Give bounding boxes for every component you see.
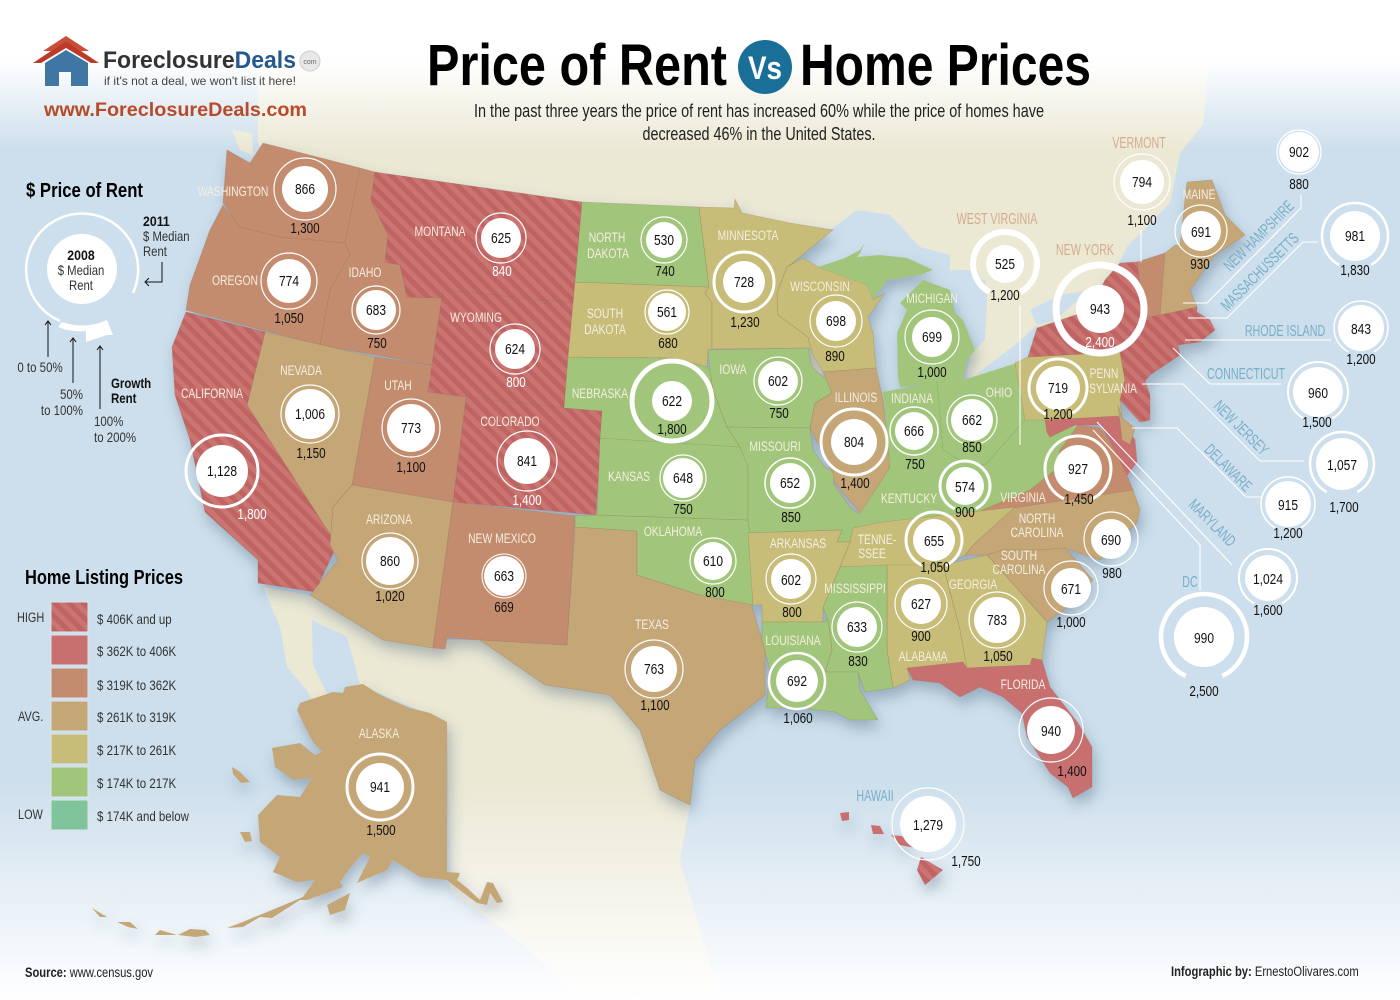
state names on map: IDAHO — [349, 264, 381, 280]
rent circle: California: 1,128 — [207, 463, 237, 479]
state names on map: ARIZONA — [366, 511, 413, 527]
rent circle: Arizona: 860 — [380, 553, 400, 569]
state names off map: VERMONT — [1112, 134, 1166, 152]
title: Price of Rent — [427, 33, 727, 98]
rent circle: New Jersey: 1,057 — [1327, 457, 1357, 473]
legend: $ 174K and below — [97, 808, 190, 824]
rent circle: Washington — [274, 158, 336, 236]
rent circle: New Mexico — [482, 554, 526, 615]
rent circle: Wisconsin: 890 — [825, 348, 845, 364]
rent circle: Indiana — [890, 407, 938, 472]
state names on map: KANSAS — [608, 468, 650, 484]
state names on map: CAROLINA — [993, 561, 1046, 577]
rent circle: Pennsylvania: 719 — [1048, 380, 1068, 396]
state names off map: CONNECTICUT — [1207, 365, 1285, 383]
rent circle: Arkansas — [766, 554, 816, 620]
rent circle: South Dakota: 680 — [658, 335, 678, 351]
state names on map: IOWA — [719, 361, 747, 377]
rent circle: Vermont: 794 — [1132, 174, 1152, 190]
logo: if it's not a deal, we won't list it here! — [104, 74, 296, 88]
rent circle: South Dakota: 561 — [657, 304, 677, 320]
rent circle: Tennessee: 1,050 — [920, 559, 950, 575]
rent circle: Rhode Island: 843 — [1351, 321, 1371, 337]
key: rent circle diagram: 100% — [94, 413, 123, 429]
rent circle: New Jersey — [1310, 432, 1374, 515]
rent circle: Louisiana — [769, 653, 825, 726]
rent circle: Maine: 930 — [1190, 256, 1210, 272]
state names on map: ILLINOIS — [835, 389, 877, 405]
rent circle: Maryland — [1239, 549, 1297, 618]
rent circle: Arizona: 1,020 — [375, 588, 405, 604]
rent circle: Arkansas: 602 — [781, 572, 801, 588]
key: rent circle diagram: $ Median — [58, 262, 104, 278]
state names on map — [181, 183, 1215, 741]
rent circle: Maryland: 1,024 — [1253, 571, 1283, 587]
rent circle: Kansas: 750 — [673, 501, 693, 517]
rent circle: Missouri: 850 — [781, 509, 801, 525]
rent circle: Alaska — [347, 754, 413, 838]
rent circle: Oklahoma: 610 — [703, 553, 723, 569]
rent circle: Nevada: 1,006 — [295, 406, 325, 422]
rent circle: Delaware: 1,200 — [1273, 525, 1303, 541]
key: rent circle diagram: Growth — [111, 375, 151, 391]
title — [427, 33, 1091, 98]
rent circle: Michigan: 1,000 — [917, 364, 947, 380]
legend: $ 362K to 406K — [97, 643, 177, 659]
rent circle: Wyoming: 800 — [506, 374, 526, 390]
Mexico landmass — [263, 587, 720, 1000]
rent circle: Alabama: 627 — [911, 596, 931, 612]
state names off map: MARYLAND — [1185, 496, 1240, 550]
state names on map: MISSISSIPPI — [824, 580, 886, 596]
title: Home Prices — [800, 33, 1091, 98]
subtitle: decreased 46% in the United States. — [642, 124, 876, 144]
rent circle: Maine: 691 — [1191, 224, 1211, 240]
state names on map: ALABAMA — [899, 648, 948, 664]
rent circle: Connecticut — [1288, 362, 1348, 430]
rent circle: Oklahoma: 800 — [705, 584, 725, 600]
key: rent circle diagram — [17, 213, 190, 445]
rent circle: Nebraska — [632, 361, 712, 441]
logo: com — [303, 59, 317, 66]
rent circle: Wisconsin: 698 — [826, 313, 846, 329]
legend: $ 174K to 217K — [97, 775, 177, 791]
rent circle: Wyoming — [490, 324, 540, 390]
state names on map: KENTUCKY — [881, 490, 937, 506]
state names on map: DAKOTA — [584, 321, 627, 337]
rent circle: Connecticut: 960 — [1308, 385, 1328, 401]
state names on map: SOUTH — [587, 305, 623, 321]
state names on map: COLORADO — [480, 413, 540, 429]
state names on map: MONTANA — [415, 223, 466, 239]
rent circle: Florida — [1019, 698, 1087, 779]
state names on map: NEVADA — [280, 362, 323, 378]
rent circle: Hawaii: 1,750 — [951, 853, 981, 869]
heading: home listing prices: Home Listing Prices — [25, 567, 183, 589]
rent circle: New York — [1056, 265, 1144, 353]
state names on map: NEW MEXICO — [468, 530, 536, 546]
state names on map: FLORIDA — [1001, 676, 1046, 692]
lower 48 states map — [172, 143, 1245, 805]
key: rent circle diagram: Rent — [143, 243, 167, 259]
state names on map: SOUTH — [1001, 547, 1037, 563]
legend: $ 319K to 362K — [97, 677, 177, 693]
rent circle: Iowa: 602 — [768, 373, 788, 389]
source: Source: www.census.gov — [25, 965, 154, 980]
rent circle: Minnesota: 1,230 — [730, 314, 760, 330]
rent circle: Minnesota: 728 — [734, 274, 754, 290]
state names on map: UTAH — [384, 377, 412, 393]
rent circle: Oregon — [261, 253, 317, 326]
rent circle: Utah: 773 — [401, 420, 421, 436]
rent circle: North Carolina: 690 — [1101, 532, 1121, 548]
rent circle: Illinois — [821, 409, 887, 491]
rent circle: Nevada — [281, 385, 339, 461]
rent circle: Utah: 1,100 — [396, 459, 426, 475]
state names on map: NORTH — [589, 229, 625, 245]
state names off map: NEW JERSEY — [1210, 397, 1272, 459]
rent circle: Delaware — [1261, 477, 1315, 541]
rent circle: Alaska: 941 — [370, 779, 390, 795]
rent circle: Montana — [476, 213, 526, 279]
leader lines — [1020, 195, 1331, 590]
legend: $ 217K to 261K — [97, 742, 177, 758]
rent circle: Mississippi: 830 — [848, 653, 868, 669]
rent circle: Michigan — [905, 310, 959, 380]
rent circle: California — [186, 435, 267, 522]
rent circle: Hawaii: 1,279 — [913, 817, 943, 833]
rent circle: Wisconsin — [810, 295, 862, 364]
state names off map: DC — [1182, 573, 1198, 591]
rent circle: Arizona — [362, 533, 418, 604]
rent circle: Florida: 940 — [1041, 723, 1061, 739]
rent circle: Kentucky: 574 — [955, 479, 975, 495]
rent circle: Maine — [1175, 205, 1227, 272]
rent circle: Vermont — [1114, 154, 1170, 228]
rent circle: Tennessee: 655 — [924, 533, 944, 549]
state names on map: GEORGIA — [949, 576, 998, 592]
rent circle: New Hampshire: 902 — [1289, 144, 1309, 160]
rent circle: South Carolina — [1044, 561, 1098, 630]
rent circle: Ohio: 850 — [962, 439, 982, 455]
rent circle: Massachusetts: 1,830 — [1340, 262, 1370, 278]
state names on map: INDIANA — [891, 390, 934, 406]
key: rent circle diagram: Rent — [69, 277, 93, 293]
rent circle: Alaska: 1,500 — [366, 822, 396, 838]
state names off map: NEW YORK — [1056, 241, 1114, 259]
rent circle: Alabama — [895, 578, 947, 644]
state names off map: MASSACHUSSETTS — [1217, 229, 1302, 314]
rent circle: West Virginia: 525 — [995, 256, 1015, 272]
rent circle: Massachusetts: 981 — [1345, 228, 1365, 244]
rent circle: South Carolina: 671 — [1061, 581, 1081, 597]
rent circle: Arkansas: 800 — [782, 604, 802, 620]
rent circle: Tennessee — [906, 512, 962, 575]
rent circle: Montana: 840 — [492, 263, 512, 279]
rent circle: Colorado: 841 — [517, 453, 537, 469]
key: rent circle diagram: 2011 — [143, 213, 170, 229]
state names on map: VIRGINIA — [1000, 489, 1046, 505]
rent circle: North Dakota: 740 — [655, 263, 675, 279]
rent circle: New Mexico: 663 — [494, 568, 514, 584]
rent circle: Nevada: 1,150 — [296, 445, 326, 461]
rent circle: Nebraska: 1,800 — [657, 421, 687, 437]
rent circle: Virginia — [1045, 436, 1111, 507]
rent circle: West Virginia — [973, 232, 1037, 303]
rent circle: Texas: 1,100 — [640, 697, 670, 713]
state names on map: MINNESOTA — [718, 227, 779, 243]
rent circle: New Hampshire — [1277, 130, 1321, 192]
legend: $ 261K to 319K — [97, 709, 177, 725]
rent circle: Texas: 763 — [644, 661, 664, 677]
state names off map: HAWAII — [856, 787, 894, 805]
heading: price of rent key: $ Price of Rent — [26, 180, 143, 202]
rent circle: Oklahoma — [690, 538, 736, 600]
rent circle: South Carolina: 1,000 — [1056, 614, 1086, 630]
rent circle: Missouri: 652 — [780, 475, 800, 491]
key: rent circle diagram: to 200% — [94, 429, 136, 445]
rent circle: Massachusetts — [1322, 203, 1388, 278]
rent circle: California: 1,800 — [237, 506, 267, 522]
Great Lakes — [790, 210, 1090, 395]
Vancouver Island — [232, 130, 253, 155]
rent circle: Louisiana: 1,060 — [783, 710, 813, 726]
state names on map: MISSOURI — [749, 438, 801, 454]
rent circle: North Dakota — [641, 217, 687, 279]
rent circle: Kentucky: 900 — [955, 504, 975, 520]
legend: LOW — [18, 807, 43, 822]
rent circle: Mississippi: 633 — [847, 619, 867, 635]
key: rent circle diagram: Rent — [111, 390, 137, 406]
state names on map: CAROLINA — [1011, 524, 1064, 540]
state names on map: OKLAHOMA — [644, 523, 703, 539]
rent circle: Minnesota — [714, 252, 774, 330]
rent circle: Iowa — [754, 357, 802, 421]
rent circle: Rhode Island — [1334, 301, 1388, 367]
legend: HIGH — [17, 610, 44, 625]
key: rent circle diagram: 2008 — [67, 247, 95, 263]
rent circle: Connecticut: 1,500 — [1302, 414, 1332, 430]
state names on map: OREGON — [212, 272, 258, 288]
rent circle: Nebraska: 622 — [662, 393, 682, 409]
key: rent circle diagram: 50% — [60, 386, 83, 402]
rent circle: New York: 2,400 — [1085, 334, 1115, 350]
rent circle: Georgia: 1,050 — [983, 648, 1013, 664]
legend: $ 406K and up — [97, 611, 172, 627]
rent circle: Florida: 1,400 — [1057, 763, 1087, 779]
rent circle: DC: 990 — [1194, 630, 1214, 646]
logo: ForeclosureDeals — [103, 47, 296, 74]
rent circle: Vermont: 1,100 — [1127, 212, 1157, 228]
rent circle: Washington: 1,300 — [290, 220, 320, 236]
state names on map: TEXAS — [635, 616, 669, 632]
credit: Infographic by: ErnestoOlivares.com — [1171, 964, 1359, 979]
Canada landmass — [258, 0, 1215, 400]
rent circle: Colorado: 1,400 — [512, 492, 542, 508]
rent circle: Virginia: 927 — [1068, 461, 1088, 477]
state names on map: SYLVANIA — [1089, 380, 1138, 396]
rent circle: Kansas: 648 — [673, 470, 693, 486]
state names on map: MAINE — [1183, 186, 1215, 202]
rent circle: Idaho: 750 — [367, 335, 387, 351]
rent circle: DC — [1161, 594, 1247, 699]
rent circle: Iowa: 750 — [769, 405, 789, 421]
rent circle: Indiana: 666 — [904, 423, 924, 439]
rent circle: Utah — [382, 399, 440, 475]
rent circle: Pennsylvania — [1029, 359, 1087, 422]
rent circle: Georgia: 783 — [987, 612, 1007, 628]
state names on map: WISCONSIN — [790, 278, 850, 294]
rent circle: Montana: 625 — [491, 230, 511, 246]
key: rent circle diagram: to 100% — [41, 402, 83, 418]
rent circle: New Mexico: 669 — [494, 599, 514, 615]
rent circle: Ohio: 662 — [962, 412, 982, 428]
Alaska map — [92, 684, 503, 937]
rent circle: Indiana: 750 — [905, 456, 925, 472]
rent circle: New York: 943 — [1090, 301, 1110, 317]
rent circle: Maryland: 1,600 — [1253, 602, 1283, 618]
state names on map: NEBRASKA — [572, 385, 629, 401]
key: rent circle diagram: $ Median — [143, 228, 190, 244]
rent circle: West Virginia: 1,200 — [990, 287, 1020, 303]
state names on map: PENN — [1090, 365, 1118, 381]
state names off map: WEST VIRGINIA — [957, 210, 1038, 228]
key: rent circle diagram: 0 to 50% — [17, 359, 63, 375]
rent circle: Michigan: 699 — [922, 329, 942, 345]
rent circle: Oregon: 1,050 — [274, 310, 304, 326]
rent circle: Washington: 866 — [295, 181, 315, 197]
rent circle: Ohio — [947, 395, 997, 455]
state names off map: DELAWARE — [1201, 441, 1255, 495]
website url: www.ForeclosureDeals.com — [43, 100, 307, 121]
state names on map: ALASKA — [359, 725, 400, 741]
rent circle: Alabama: 900 — [911, 628, 931, 644]
subtitle — [474, 101, 1044, 144]
rent circle: Hawaii — [892, 788, 981, 869]
top fade — [0, 0, 1400, 150]
rent circle: Georgia — [969, 592, 1025, 664]
rent circle: Louisiana: 692 — [787, 673, 807, 689]
rent circle: Illinois: 804 — [844, 434, 864, 450]
rent circle: Rhode Island: 1,200 — [1346, 351, 1376, 367]
rent circle: Oregon: 774 — [279, 273, 299, 289]
rent circle: North Carolina — [1084, 512, 1138, 581]
rent circle: Kansas — [660, 455, 706, 517]
logo — [33, 36, 320, 88]
subtitle: In the past three years the price of rent has increased 60% while the price of homes have — [474, 101, 1044, 121]
rent circle: Kentucky — [940, 461, 990, 520]
state names on map: NORTH — [1019, 510, 1055, 526]
rent circle: South Dakota — [645, 290, 689, 351]
rent circle: Wyoming: 624 — [505, 341, 525, 357]
rent circle: Pennsylvania: 1,200 — [1043, 406, 1073, 422]
title: Vs — [748, 50, 782, 86]
state names on map: TENNE- — [858, 531, 896, 547]
state names on map: WASHINGTON — [198, 183, 268, 199]
state names on map: CALIFORNIA — [181, 385, 244, 401]
rent circle: North Carolina: 980 — [1102, 565, 1122, 581]
rent circle: Missouri — [765, 458, 815, 525]
state names on map: ARKANSAS — [770, 535, 826, 551]
rent circle: North Dakota: 530 — [654, 232, 674, 248]
state names off map — [856, 134, 1325, 805]
Hawaii map — [840, 812, 943, 885]
rent circle: Idaho — [352, 286, 400, 351]
state names on map: DAKOTA — [587, 245, 630, 261]
state names off map: RHODE ISLAND — [1245, 322, 1325, 340]
rent circle: Colorado — [497, 431, 557, 508]
state names on map: LOUISIANA — [765, 632, 821, 648]
rent circle: New Hampshire: 880 — [1289, 176, 1309, 192]
legend: AVG. — [18, 709, 43, 724]
state names on map: WYOMING — [450, 309, 502, 325]
state names on map: OHIO — [986, 384, 1012, 400]
bottom fade — [0, 780, 1400, 1000]
state names off map: NEW HAMPSHIRE — [1220, 197, 1297, 274]
rent circle: Illinois: 1,400 — [840, 475, 870, 491]
rent circle: Texas — [625, 640, 683, 713]
rent circle: Idaho: 683 — [366, 302, 386, 318]
rent circle: DC: 2,500 — [1189, 683, 1219, 699]
rent circle: Delaware: 915 — [1278, 497, 1298, 513]
rent circle: New Jersey: 1,700 — [1329, 499, 1359, 515]
state names on map: MICHIGAN — [906, 290, 958, 306]
rent circle: Mississippi — [832, 602, 882, 669]
rent circle: Virginia: 1,450 — [1064, 491, 1094, 507]
legend — [17, 602, 190, 830]
state names on map: SSEE — [858, 545, 886, 561]
